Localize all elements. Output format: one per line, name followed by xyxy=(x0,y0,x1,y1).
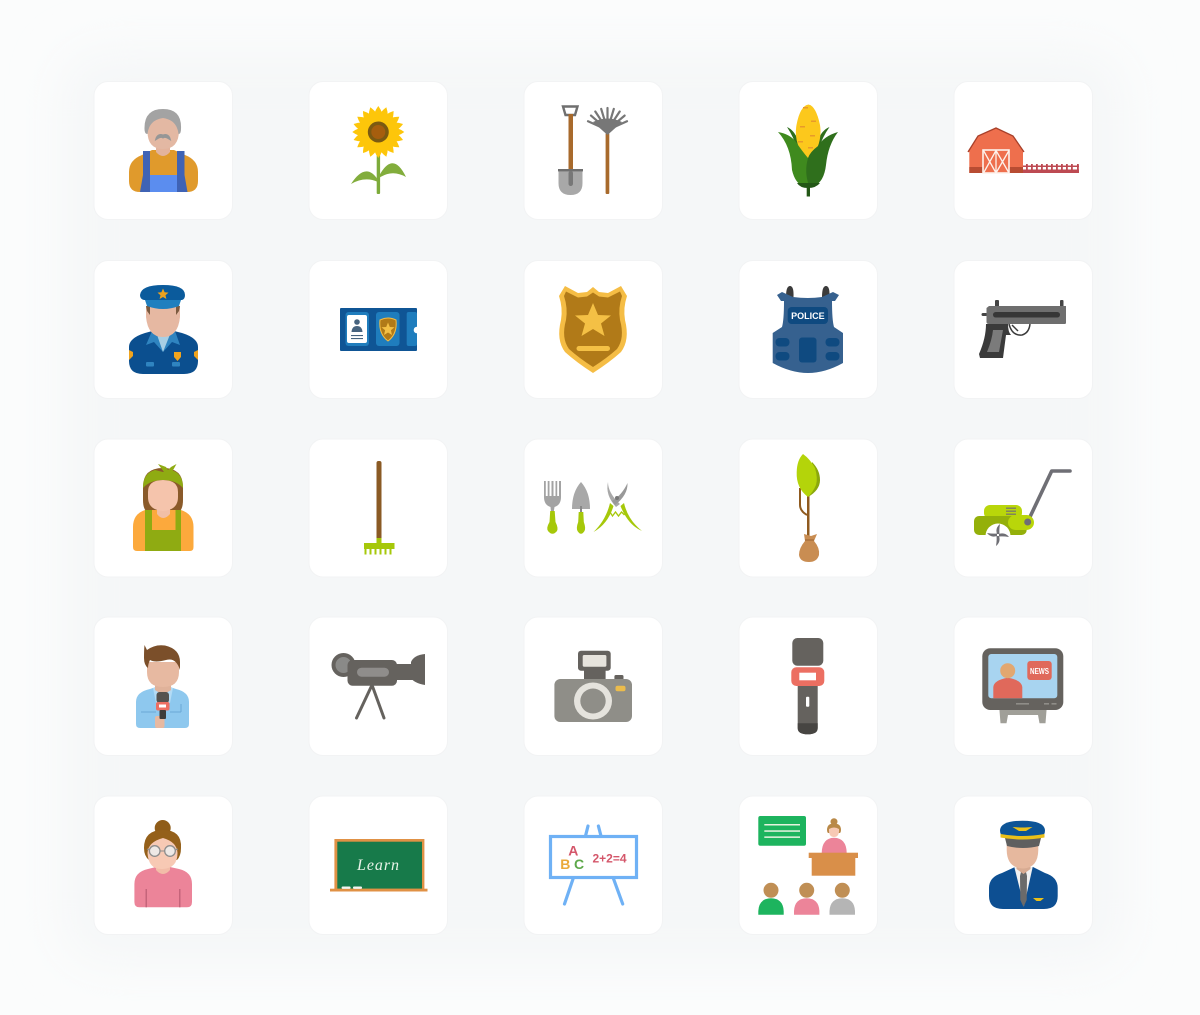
text: abc and sum: 2+2=4 xyxy=(592,852,627,866)
icon: corn cob xyxy=(778,104,838,196)
icon: woman farmer xyxy=(133,464,194,551)
card: video camera xyxy=(309,617,448,756)
icon: easel board xyxy=(550,826,636,904)
card: sapling xyxy=(739,439,878,577)
icon: male farmer xyxy=(129,109,198,192)
card: reporter xyxy=(94,617,232,756)
card: barn xyxy=(954,82,1092,220)
card: blackboard xyxy=(309,796,448,934)
icon: police shield badge xyxy=(559,286,627,373)
card: microphone xyxy=(739,617,878,756)
icon: garden tiller xyxy=(974,471,1070,548)
text: abc and sum xyxy=(560,842,627,872)
card: police id xyxy=(309,260,448,398)
text: news sign: NEWS xyxy=(1030,667,1050,676)
icon: video camera on tripod xyxy=(332,653,425,718)
icon: news reporter xyxy=(136,645,189,728)
icon: airline pilot xyxy=(989,821,1058,909)
card: sunflower xyxy=(309,82,448,220)
card: shovel and rake xyxy=(524,82,662,220)
card: corn xyxy=(739,82,878,220)
card: pistol xyxy=(954,260,1092,398)
icon: teacher xyxy=(134,820,192,907)
text: abc and sum: C xyxy=(574,856,584,872)
icon: fork, trowel and pruners xyxy=(544,481,642,534)
card: police officer xyxy=(94,260,232,398)
icon: police officer xyxy=(129,285,198,374)
card: farmer xyxy=(94,82,232,220)
icon: sapling in sack xyxy=(797,454,820,562)
card: garden tools xyxy=(524,439,662,577)
icon: sunflower xyxy=(351,106,406,194)
text: learn: Learn xyxy=(356,857,399,874)
card: police badge xyxy=(524,260,662,398)
card: classroom xyxy=(739,796,878,934)
card: teacher xyxy=(94,796,232,934)
icon: rake xyxy=(364,461,394,554)
icon: police id wallet xyxy=(340,308,420,351)
icon: reporter microphone xyxy=(791,638,824,734)
card: television news xyxy=(954,617,1092,756)
card: rake xyxy=(309,439,448,577)
icon: classroom xyxy=(758,816,858,915)
text: abc and sum: A xyxy=(568,842,578,858)
card: pilot xyxy=(954,796,1092,934)
card: woman farmer xyxy=(94,439,232,577)
card: photo camera xyxy=(524,617,662,756)
card: police vest xyxy=(739,260,878,398)
card: easel xyxy=(524,796,662,934)
text: abc and sum: B xyxy=(560,856,570,872)
card: tiller xyxy=(954,439,1092,577)
icon: pistol xyxy=(979,300,1066,358)
text: police label: POLICE xyxy=(791,311,825,321)
icon: barn and fence xyxy=(968,128,1079,173)
icon: shovel and rake xyxy=(558,106,627,195)
icon: photo camera xyxy=(554,651,632,722)
